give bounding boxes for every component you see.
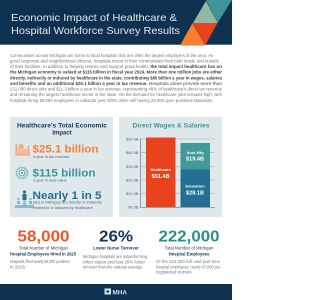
icon: total value gear xyxy=(16,168,28,178)
header triangles xyxy=(180,0,232,46)
stat: total value: a year in total value xyxy=(33,178,67,182)
bar: auto manufacturing: $19.4B xyxy=(186,156,204,162)
intro paragraph: and benefits and an additional $25.1 billion a year in tax revenue. Hospitals alone provide more than xyxy=(10,81,222,86)
panel heading xyxy=(17,124,108,136)
bar: healthcare xyxy=(146,138,176,207)
panel: direct wages and salaries xyxy=(119,117,222,217)
title: Hospital Workforce Survey Results xyxy=(11,26,180,37)
bar chart: $50.0B xyxy=(126,136,139,142)
icon: tax revenue chart xyxy=(15,144,30,156)
bar: education: Education xyxy=(185,184,205,188)
intro paragraph xyxy=(10,53,222,103)
MHA logo: MHA xyxy=(112,290,128,296)
title: Economic Impact of Healthcare & xyxy=(11,13,177,24)
intro paragraph: hospitals hiring 58,000 employees in calendar year 2025, while still having 23,000 open positions statewide. xyxy=(10,98,213,103)
bar chart: $0.0B xyxy=(128,205,139,210)
stat column: hospital employees: hospital employees, nearly 47,000 are xyxy=(156,264,220,270)
stat column: hospital hires: Hospital Employees Hired in 2025 xyxy=(10,252,77,256)
stat column: nurse turnover: 26% xyxy=(99,229,133,246)
stat column: hospital hires xyxy=(10,229,77,270)
stat column: hospital hires: Total Number of Michigan xyxy=(19,246,68,250)
bar chart: $10.0B xyxy=(126,191,139,196)
stat: tax revenue: a year in tax revenue xyxy=(33,154,69,159)
bar chart: $20.0B xyxy=(126,178,139,182)
bar: auto manufacturing xyxy=(180,143,210,170)
stat column: hospital employees: Hospital Employees xyxy=(169,252,210,256)
intro paragraph: directly, indirectly or induced by healthcare in the state, contributing $85 billion a year in wages, salaries xyxy=(10,75,222,80)
intro paragraph: of their facilities. In addition to helping restore and support good health, the total impact healthcare has on xyxy=(10,64,222,69)
stat: jobs xyxy=(32,190,102,210)
bar chart: $40.0B xyxy=(126,150,139,155)
stat: total value: $115 billion xyxy=(32,168,96,180)
stat: jobs: Nearly 1 in 5 xyxy=(32,190,102,202)
intro paragraph: 222,000 direct jobs and $11.3 billion a year in tax revenue, representing 48% of healthcare's direct tax revenue xyxy=(10,86,222,91)
stat column: hospital employees: Of the 222,000 full- and part-time xyxy=(156,259,220,264)
stat column: hospital hires: in 2025. xyxy=(10,264,26,270)
bar: healthcare: Healthcare xyxy=(150,167,172,172)
stat column: hospital hires: Hospitals filled nearly 58,000 positions xyxy=(10,259,71,264)
panel heading: Healthcare's Total Economic xyxy=(17,124,108,130)
bar chart xyxy=(126,136,215,210)
stat column: nurse turnover: Michigan hospitals are outperforming xyxy=(83,254,147,259)
stat column: hospital employees xyxy=(156,229,220,274)
chart title: Direct Wages & Salaries xyxy=(132,124,210,130)
stat column: nurse turnover: Lower Nurse Turnover xyxy=(93,246,139,250)
stat column: nurse turnover: turnover than the national average. xyxy=(83,264,143,270)
stat column: hospital employees: Total Number of Michigan xyxy=(165,246,214,250)
bar: healthcare: $51.4B xyxy=(152,174,170,180)
bar: education: $28.1B xyxy=(186,190,204,196)
panel: total economic impact xyxy=(10,117,113,217)
bar: auto manufacturing: Auto Mfg xyxy=(186,150,204,155)
stat: jobs: jobs in Michigan are directly or indirectly xyxy=(32,200,102,204)
stat column: nurse turnover xyxy=(83,229,147,270)
footer xyxy=(0,284,232,300)
stat: tax revenue: $25.1 billion xyxy=(32,144,99,156)
stat column: nurse turnover: other states and has 26% lower xyxy=(83,260,145,264)
bar: education xyxy=(180,170,210,207)
intro paragraph: the Michigan economy is valued at $115 billion in fiscal year 2024. More than one million jobs are either xyxy=(10,70,222,75)
stat column: hospital employees: 222,000 xyxy=(158,229,220,246)
intro paragraph: good corporate and neighborhood citizens, hospitals invest in their communities from both inside and outside xyxy=(10,58,219,64)
panel heading: Impact xyxy=(52,130,72,136)
title xyxy=(11,13,180,37)
stat column: hospital employees: registered nurses. xyxy=(156,270,193,274)
intro paragraph: Communities across Michigan are home to local hospitals that are often the largest employers in the area. As xyxy=(10,53,214,58)
MHA logo xyxy=(104,288,128,296)
bar chart: $30.0B xyxy=(126,164,139,169)
stat: jobs: related to or induced by healthcare xyxy=(33,205,93,210)
stat column: hospital hires: 58,000 xyxy=(18,229,70,246)
icon: people xyxy=(15,190,34,208)
header banner xyxy=(0,0,232,46)
intro paragraph: and remaining the largest healthcare sector in the state. Yet the demand for healthcare jobs remains high, with xyxy=(10,92,222,97)
